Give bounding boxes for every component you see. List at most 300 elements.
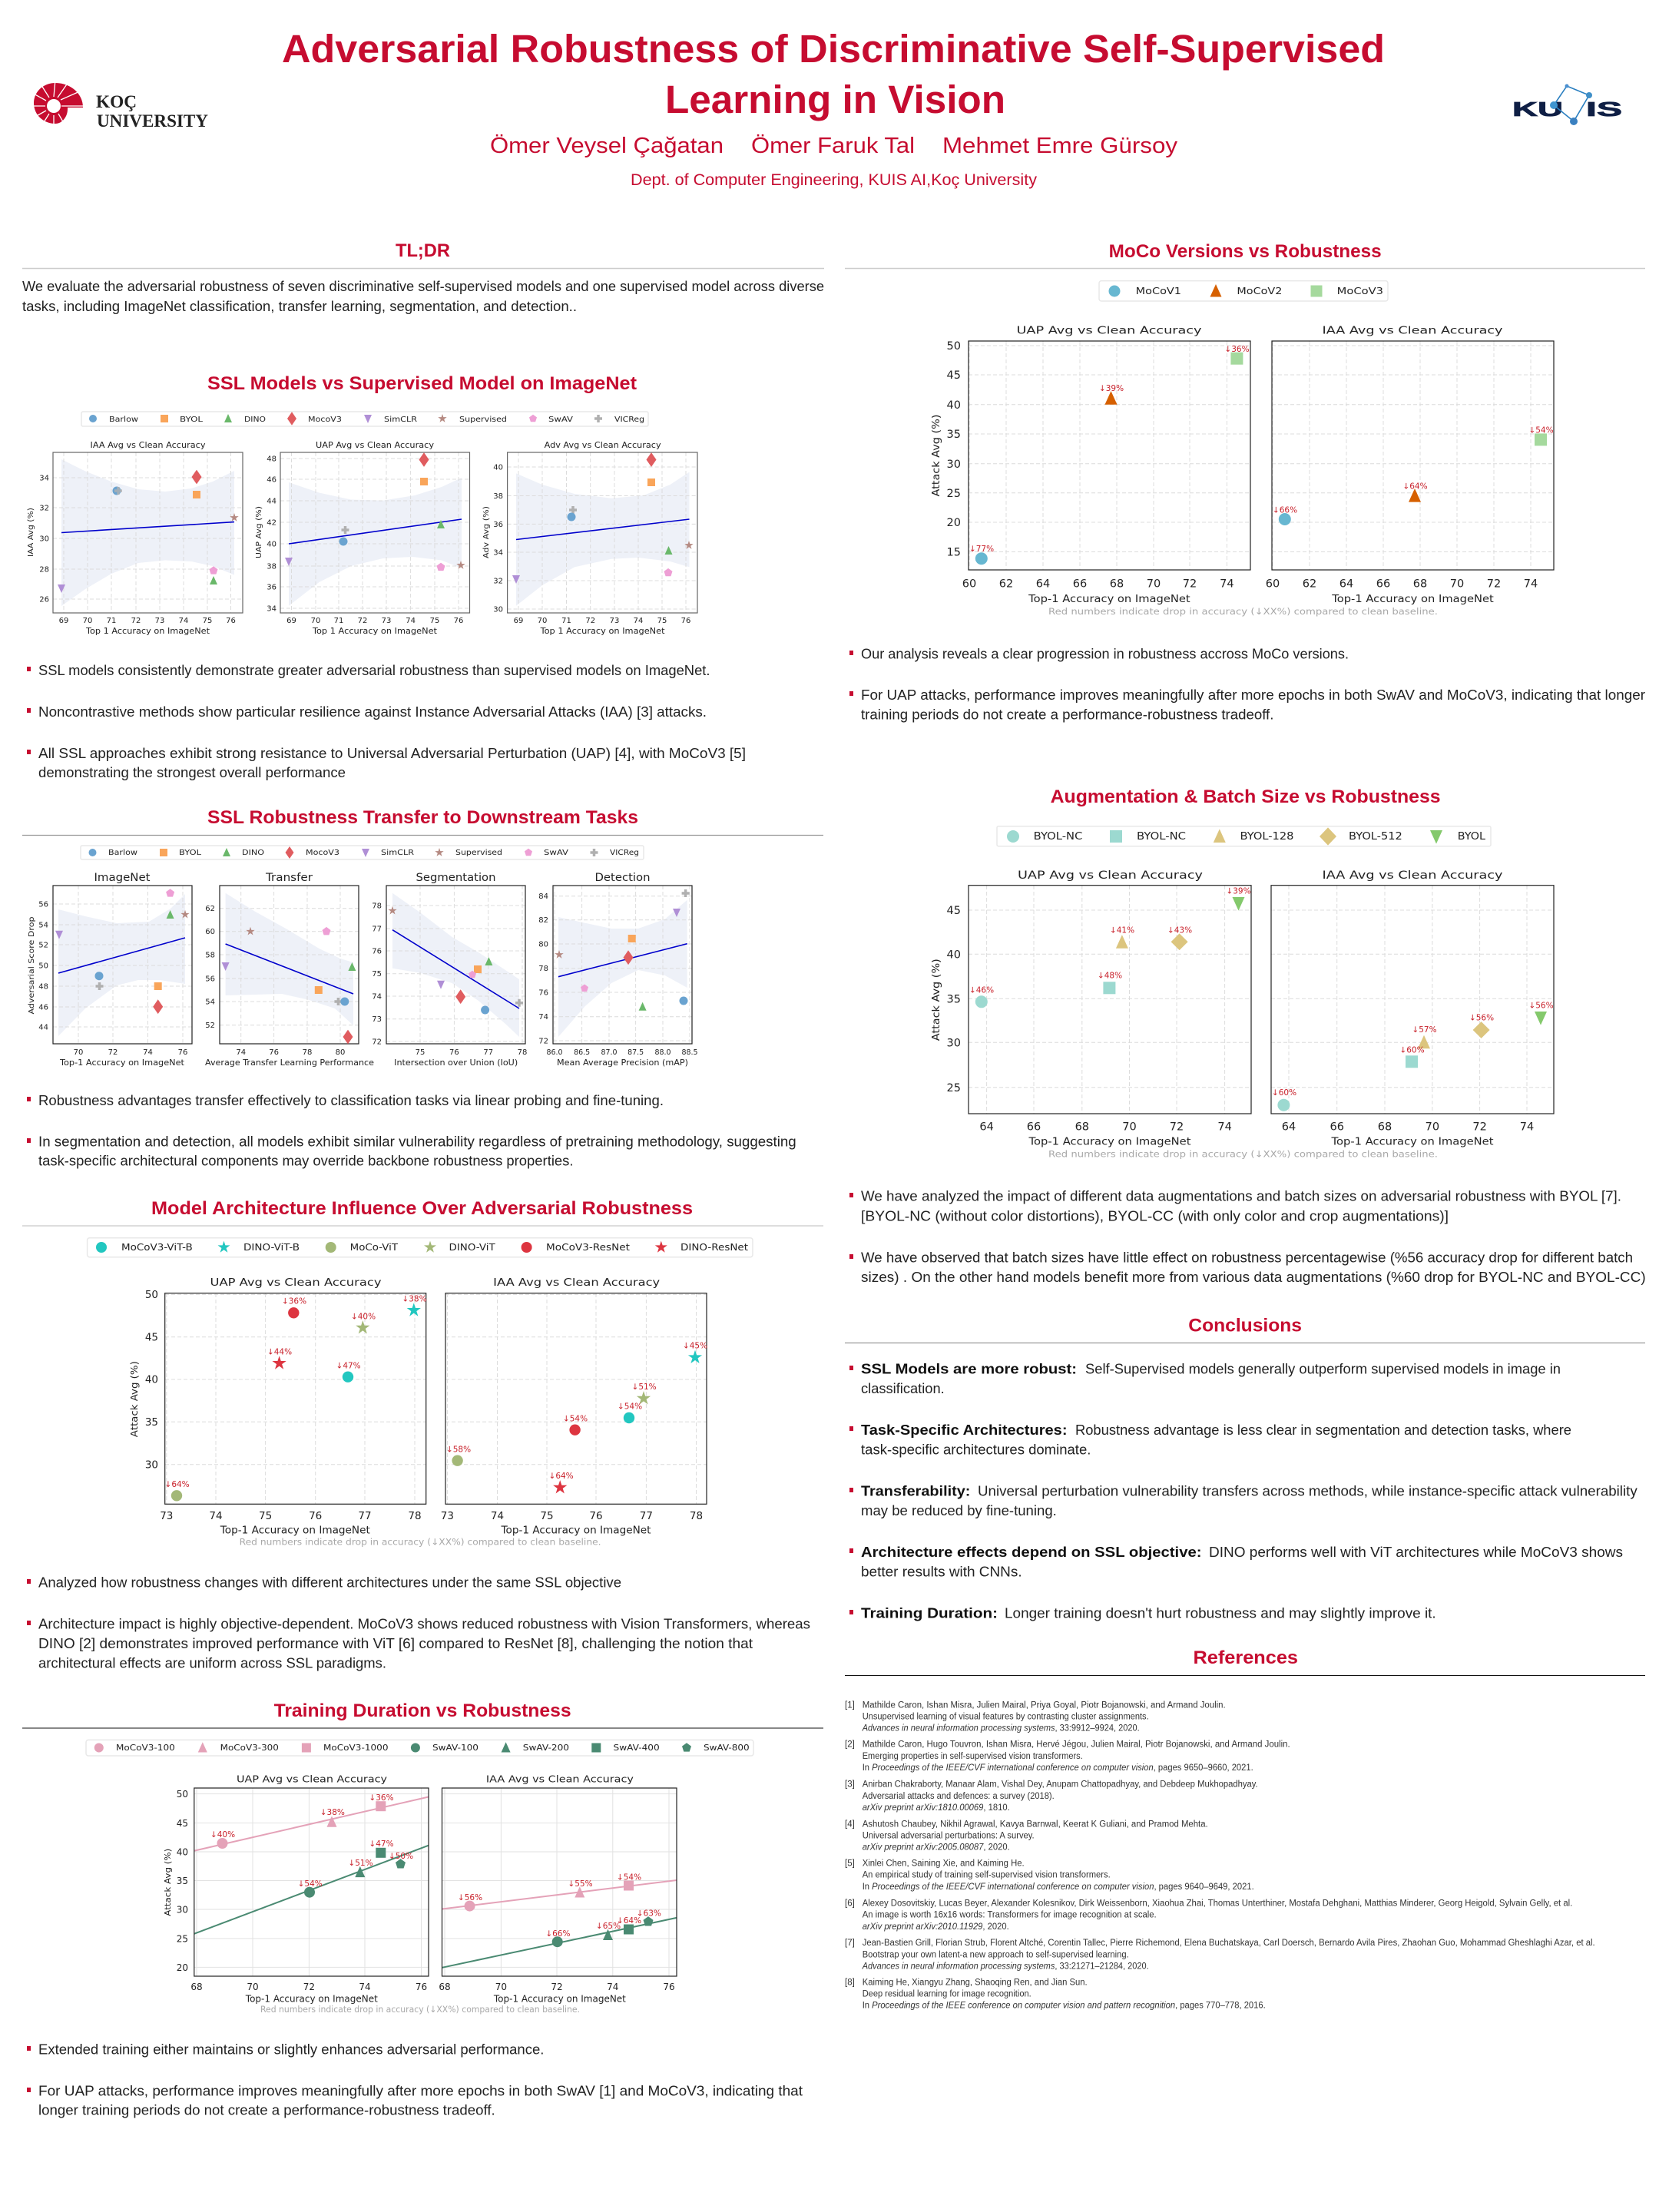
chart: Adv Avg vs Clean Accuracy: 72 [585, 617, 595, 625]
chart: UAP Avg vs Clean Accuracy: 70 [1122, 1121, 1137, 1134]
reference list: arXiv preprint arXiv:1810.00069, 1810. [863, 1803, 1010, 1813]
chart: UAP Avg vs Clean Accuracy: ↓51% [348, 1859, 373, 1868]
chart: IAA Avg vs Clean Accuracy: IAA Avg vs Clean Accuracy [493, 1277, 660, 1289]
chart: Segmentation: 77 [483, 1048, 493, 1057]
chart: UAP Avg vs Clean Accuracy: 68 [1075, 1121, 1089, 1134]
chart note: Red numbers indicate drop in accuracy (↓XX%) compared to clean baseline. [260, 2004, 580, 2015]
chart: Detection: Detection [594, 872, 650, 884]
chart: IAA Avg vs Clean Accuracy: 76 [663, 1982, 675, 1992]
chart: Adv Avg vs Clean Accuracy: 36 [493, 521, 503, 529]
chart: Detection: 87.5 [628, 1048, 644, 1057]
chart: IAA Avg vs Clean Accuracy: 73 [441, 1510, 454, 1522]
chart: Segmentation: Segmentation [416, 872, 496, 884]
summary text: We evaluate the adversarial robustness of seven discriminative self-supervised models and one supervised model across diverse [22, 278, 824, 294]
chart: IAA Avg vs Clean Accuracy: ↓54% [617, 1873, 641, 1882]
chart: UAP Avg vs Clean Accuracy: ↓44% [267, 1347, 292, 1356]
reference list: Universal adversarial perturbations: A survey. [863, 1831, 1035, 1840]
chart: UAP Avg vs Clean Accuracy: UAP Avg (%) [255, 506, 263, 558]
header: title, authors and logos [31, 27, 1622, 189]
conclusion: architecture effects: DINO performs well with ViT architectures while MoCoV3 shows [1209, 1544, 1623, 1560]
logo: Koç University: UNIVERSITY [97, 111, 208, 131]
authors: Ömer Veysel Çağatan [490, 134, 724, 158]
chart: Adv Avg vs Clean Accuracy: 40 [493, 464, 503, 472]
bullet list [27, 2041, 803, 2118]
chart: UAP Avg vs Clean Accuracy: 73 [382, 617, 391, 625]
chart note: Red numbers indicate drop in accuracy (↓XX%) compared to clean baseline. [1048, 1149, 1438, 1160]
chart: UAP Avg vs Clean Accuracy: 40 [947, 949, 961, 962]
legend: epochs: SwAV-800 [704, 1743, 750, 1753]
chart: IAA Avg vs Clean Accuracy: 75 [203, 617, 212, 625]
chart: IAA Avg vs Clean Accuracy: 62 [1303, 578, 1316, 590]
reference list: [7] [845, 1939, 855, 1948]
chart: IAA Avg vs Clean Accuracy: ↓45% [683, 1341, 707, 1350]
logo: Koç University [31, 80, 208, 131]
legend: architectures: MoCo-ViT [350, 1242, 399, 1253]
affiliation: Dept. of Computer Engineering, KUIS AI,Koç University [631, 171, 1037, 189]
conclusion: task-specific architectures: Task-Specific Architectures: [861, 1422, 1068, 1438]
chart: Detection: 80 [538, 940, 548, 949]
bullet list: demonstrating the strongest overall performance [38, 764, 346, 780]
chart: UAP Avg vs Clean Accuracy: 25 [947, 1082, 961, 1094]
chart: UAP Avg vs Clean Accuracy: 15 [947, 547, 961, 559]
conclusion: task-specific architectures [849, 1422, 1571, 1458]
legend: epochs: SwAV-400 [613, 1743, 660, 1753]
reference list: Anirban Chakraborty, Manaar Alam, Vishal Dey, Anupam Chattopadhyay, and Debdeep Mukhopadhyay. [863, 1780, 1258, 1790]
chart: IAA Avg vs Clean Accuracy: ↓65% [596, 1922, 621, 1931]
chart: IAA Avg vs Clean Accuracy: 77 [640, 1510, 653, 1522]
reference list: Advances in neural information processing systems, 33:21271–21284, 2020. [862, 1962, 1149, 1971]
bullet list: We have observed that batch sizes have little effect on robustness percentagewise (%56 accuracy drop for different batch [861, 1250, 1633, 1266]
chart: IAA Avg vs Clean Accuracy: 30 [39, 535, 49, 544]
chart: Adv Avg vs Clean Accuracy: Adv Avg vs Clean Accuracy [545, 441, 661, 450]
reference list: An empirical study of training self-supervised vision transformers. [863, 1871, 1111, 1880]
chart: ImageNet [28, 872, 192, 1068]
chart: Detection: 87.0 [601, 1048, 618, 1057]
chart: UAP Avg vs Clean Accuracy: 36 [267, 584, 276, 591]
chart: UAP Avg vs Clean Accuracy: 72 [1170, 1121, 1184, 1134]
bullet list [27, 1575, 810, 1671]
chart: Adv Avg vs Clean Accuracy: 76 [681, 617, 690, 625]
chart: IAA Avg vs Clean Accuracy: ↓63% [637, 1909, 661, 1919]
chart: Detection: 84 [538, 892, 548, 901]
chart: IAA Avg vs Clean Accuracy: Top-1 Accuracy on ImageNet [1330, 1136, 1493, 1148]
legend: models: Supervised [455, 849, 502, 857]
panel: augmentation and batch size [849, 786, 1646, 1285]
chart: IAA Avg vs Clean Accuracy: ↓55% [568, 1879, 593, 1889]
chart: Segmentation [372, 872, 527, 1068]
chart: UAP Avg vs Clean Accuracy: ↓39% [1099, 384, 1124, 393]
bullet list: Architecture impact is highly objective-dependent. MoCoV3 shows reduced robustness with Vision Transformers, whereas [38, 1616, 810, 1632]
heading: MoCo Versions vs Robustness [1109, 241, 1382, 262]
legend: epochs: MoCoV3-100 [116, 1743, 175, 1753]
bullet list: In segmentation and detection, all models exhibit similar vulnerability regardless of pretraining methodology, suggesting [38, 1134, 796, 1150]
chart: Segmentation: 75 [372, 970, 382, 979]
conclusion: training duration: Longer training doesn't hurt robustness and may slightly improve it. [1005, 1604, 1436, 1621]
chart: IAA Avg vs Clean Accuracy: 74 [607, 1982, 618, 1992]
chart: Adv Avg vs Clean Accuracy: 73 [610, 617, 619, 625]
chart: IAA Avg vs Clean Accuracy: 71 [107, 617, 116, 625]
legend: architectures: MoCoV3-ResNet [546, 1242, 630, 1253]
panel: model architecture [22, 1198, 823, 1671]
chart: IAA Avg vs Clean Accuracy [1266, 324, 1554, 605]
conclusion: SSL models: Self-Supervised models generally outperform supervised models in image in [1085, 1360, 1561, 1376]
chart: UAP Avg vs Clean Accuracy [129, 1277, 427, 1537]
reference list: Advances in neural information processing systems, 33:9912–9924, 2020. [862, 1724, 1140, 1734]
chart: UAP Avg vs Clean Accuracy: 72 [303, 1982, 315, 1992]
reference list: Mathilde Caron, Ishan Misra, Julien Mairal, Priya Goyal, Piotr Bojanowski, and Armand Joulin. [863, 1700, 1226, 1710]
chart: UAP Avg vs Clean Accuracy: 40 [267, 541, 276, 548]
bullet list: For UAP attacks, performance improves meaningfully after more epochs in both SwAV and MoCoV3, indicating that longer [861, 687, 1645, 703]
chart: ImageNet: Top-1 Accuracy on ImageNet [59, 1058, 184, 1068]
chart: UAP Avg vs Clean Accuracy: Attack Avg (%) [129, 1361, 140, 1437]
bullet list: architectural effects are uniform across SSL paradigms. [38, 1655, 386, 1671]
chart: IAA Avg vs Clean Accuracy [1271, 869, 1554, 1148]
chart: UAP Avg vs Clean Accuracy: 74 [1217, 1121, 1232, 1134]
chart: UAP Avg vs Clean Accuracy: UAP Avg vs Clean Accuracy [316, 441, 434, 450]
bullet list: task-specific architectural components may override backbone robustness properties. [38, 1153, 573, 1169]
chart: UAP Avg vs Clean Accuracy: Top-1 Accuracy on ImageNet [1028, 593, 1190, 605]
chart: IAA Avg vs Clean Accuracy: 64 [1282, 1121, 1296, 1134]
legend: models: DINO [244, 416, 266, 424]
reference list: Adversarial attacks and defences: a survey (2018). [863, 1792, 1055, 1801]
chart: Segmentation: 76 [372, 948, 382, 955]
legend: MoCo versions: MoCoV1 [1136, 286, 1181, 296]
legend: models: SwAV [544, 849, 568, 857]
legend: models: Barlow [108, 849, 137, 857]
conclusion: transferability: Universal perturbation vulnerability transfers across methods, while instance-specific attack vulnerability [978, 1482, 1637, 1498]
reference list: Jean-Bastien Grill, Florian Strub, Florent Altché, Corentin Tallec, Pierre Richemond, Elena Buchatskaya, Carl Doersch, Bernardo Avila Pires, Zhaohan Guo, Mohammad Gheshlaghi Azar, et al. [863, 1939, 1595, 1948]
chart note: Red numbers indicate drop in accuracy (↓XX%) compared to clean baseline. [1048, 606, 1438, 617]
chart: UAP Avg vs Clean Accuracy [164, 1774, 429, 2005]
chart: Transfer [205, 872, 374, 1068]
chart: IAA Avg vs Clean Accuracy: 74 [179, 617, 188, 625]
chart: UAP Avg vs Clean Accuracy: UAP Avg vs Clean Accuracy [1017, 324, 1201, 336]
heading: SSL Robustness Transfer to Downstream Tasks [207, 807, 638, 828]
conclusion: architecture effects: Architecture effects depend on SSL objective: [861, 1544, 1201, 1560]
chart: UAP Avg vs Clean Accuracy: 35 [177, 1876, 188, 1886]
chart: IAA Avg vs Clean Accuracy: 32 [39, 504, 49, 513]
chart: UAP Avg vs Clean Accuracy: UAP Avg vs Clean Accuracy [210, 1277, 381, 1289]
reference list: Emerging properties in self-supervised vision transformers. [863, 1752, 1083, 1761]
summary text: tasks, including ImageNet classification, transfer learning, segmentation, and detection.. [22, 298, 577, 314]
chart: ImageNet: 76 [178, 1048, 187, 1057]
chart: UAP Avg vs Clean Accuracy: UAP Avg vs Clean Accuracy [237, 1774, 387, 1785]
chart: UAP Avg vs Clean Accuracy: 45 [947, 905, 961, 917]
chart: Detection: 86.5 [574, 1048, 590, 1057]
chart: UAP Avg vs Clean Accuracy: 45 [177, 1818, 188, 1829]
chart: UAP Avg vs Clean Accuracy: Attack Avg (%) [931, 415, 942, 496]
bullet list: longer training periods do not create a performance-robustness tradeoff. [38, 2102, 495, 2118]
legend: models [81, 846, 644, 859]
chart: IAA Avg vs Clean Accuracy: 70 [1450, 578, 1464, 590]
bullet list: We have analyzed the impact of different data augmentations and batch sizes on adversarial robustness with BYOL [7]. [861, 1188, 1621, 1204]
chart: Segmentation: Intersection over Union (IoU) [394, 1058, 518, 1068]
chart: UAP Avg vs Clean Accuracy: ↓50% [389, 1852, 413, 1861]
panel: conclusions [845, 1315, 1645, 1621]
chart: IAA Avg vs Clean Accuracy: 70 [83, 617, 92, 625]
chart: Segmentation: 72 [372, 1038, 382, 1046]
heading: Conclusions [1188, 1315, 1302, 1336]
legend: architectures [88, 1238, 753, 1257]
chart: IAA Avg vs Clean Accuracy: ↓56% [1528, 1001, 1554, 1010]
reference list: Alexey Dosovitskiy, Lucas Beyer, Alexander Kolesnikov, Dirk Weissenborn, Xiaohua Zhai, Thomas Unterthiner, Mostafa Dehghani, Matthias Minderer, Georg Heigold, Sylvain Gelly, et al. [863, 1899, 1572, 1909]
chart: IAA Avg vs Clean Accuracy: 34 [39, 475, 49, 482]
chart: IAA Avg vs Clean Accuracy [441, 1277, 707, 1537]
chart: IAA Avg vs Clean Accuracy: 69 [59, 617, 68, 625]
chart: Detection: 82 [538, 916, 548, 925]
chart: UAP Avg vs Clean Accuracy: 77 [358, 1510, 372, 1522]
conclusion: architecture effects: better results with CNNs. [861, 1564, 1022, 1580]
bullet list: Extended training either maintains or slightly enhances adversarial performance. [38, 2041, 544, 2057]
reference list: Kaiming He, Xiangyu Zhang, Shaoqing Ren, and Jian Sun. [863, 1978, 1088, 1987]
reference list: In Proceedings of the IEEE/CVF international conference on computer vision, pages 9650–9660, 2021. [863, 1763, 1253, 1773]
chart: UAP Avg vs Clean Accuracy: ↓36% [1224, 345, 1250, 354]
chart: Adv Avg vs Clean Accuracy: Top 1 Accuracy on ImageNet [540, 627, 665, 636]
bullet list: All SSL approaches exhibit strong resistance to Universal Adversarial Perturbation (UAP) [4], with MoCoV3 [5] [38, 745, 746, 761]
reference list: [6] [845, 1899, 855, 1909]
chart: Transfer: 60 [205, 928, 215, 936]
legend: models: VICReg [610, 849, 639, 857]
chart: IAA Avg vs Clean Accuracy: 75 [540, 1510, 554, 1522]
reference list: [5] [845, 1859, 855, 1869]
chart: UAP Avg vs Clean Accuracy: ↓77% [969, 545, 994, 554]
chart: UAP Avg vs Clean Accuracy: 73 [160, 1510, 173, 1522]
chart: UAP Avg vs Clean Accuracy: 25 [177, 1934, 188, 1945]
chart: UAP Avg vs Clean Accuracy: ↓36% [369, 1793, 394, 1803]
chart: IAA Avg vs Clean Accuracy: IAA Avg vs Clean Accuracy [486, 1774, 634, 1785]
chart: UAP Avg vs Clean Accuracy: ↓54% [298, 1879, 323, 1889]
chart: Detection: 74 [538, 1013, 548, 1022]
legend: models: Supervised [459, 416, 507, 424]
chart: UAP Avg vs Clean Accuracy: 44 [267, 498, 276, 505]
chart: UAP Avg vs Clean Accuracy: 35 [947, 994, 961, 1006]
legend: models: MocoV3 [308, 416, 342, 424]
chart: UAP Avg vs Clean Accuracy [931, 324, 1250, 605]
chart: IAA Avg vs Clean Accuracy: Top-1 Accuracy on ImageNet [1331, 593, 1494, 605]
chart: UAP Avg vs Clean Accuracy: Top-1 Accuracy on ImageNet [220, 1525, 370, 1537]
chart: ImageNet: 56 [38, 900, 48, 909]
legend: BYOL variants: BYOL-NC [1137, 831, 1186, 843]
chart: Adv Avg vs Clean Accuracy: 34 [493, 548, 503, 558]
chart: UAP Avg vs Clean Accuracy: ↓38% [402, 1294, 427, 1303]
bullet list: DINO [2] demonstrates improved performance with ViT [6] compared to ResNet [8], challenging the notion that [38, 1635, 753, 1651]
chart: UAP Avg vs Clean Accuracy: 66 [1073, 578, 1087, 590]
chart: Transfer: 80 [336, 1048, 345, 1057]
chart note: Red numbers indicate drop in accuracy (↓XX%) compared to clean baseline. [240, 1537, 601, 1548]
chart: UAP Avg vs Clean Accuracy: 68 [1110, 578, 1124, 590]
chart: ImageNet: 50 [38, 962, 48, 971]
legend: MoCo versions: MoCoV2 [1237, 286, 1282, 296]
legend: models: DINO [242, 849, 264, 857]
panel: training duration [22, 1700, 823, 2118]
chart: UAP Avg vs Clean Accuracy: 64 [979, 1121, 994, 1134]
legend: BYOL variants [997, 826, 1491, 846]
chart: IAA Avg vs Clean Accuracy: ↓56% [458, 1893, 482, 1902]
reference list [845, 1700, 1595, 2011]
chart: UAP Avg vs Clean Accuracy: 20 [177, 1962, 188, 1973]
chart: IAA Avg vs Clean Accuracy: 74 [1524, 578, 1538, 590]
chart: UAP Avg vs Clean Accuracy: 66 [1027, 1121, 1041, 1134]
conclusion: task-specific architectures: Robustness advantage is less clear in segmentation and detection tasks, where [1075, 1422, 1571, 1438]
chart: UAP Avg vs Clean Accuracy: 34 [267, 605, 276, 613]
reference list: Mathilde Caron, Hugo Touvron, Ishan Misra, Hervé Jégou, Julien Mairal, Piotr Bojanowski, and Armand Joulin. [863, 1740, 1290, 1750]
legend: models: SimCLR [384, 416, 417, 424]
reference list: [8] [845, 1978, 855, 1987]
legend: epochs: SwAV-100 [432, 1743, 478, 1753]
chart: Adv Avg vs Clean Accuracy: 30 [493, 605, 503, 614]
chart: IAA Avg vs Clean Accuracy: ↓60% [1399, 1045, 1425, 1055]
chart: IAA Avg vs Clean Accuracy: ↓66% [1273, 506, 1297, 515]
bullet list: SSL models consistently demonstrate greater adversarial robustness than supervised models on ImageNet. [38, 662, 710, 678]
chart: UAP Avg vs Clean Accuracy: 45 [145, 1332, 158, 1344]
chart: IAA Avg vs Clean Accuracy: ↓64% [549, 1472, 574, 1481]
chart: UAP Avg vs Clean Accuracy: 60 [962, 578, 976, 590]
chart: UAP Avg vs Clean Accuracy: Top-1 Accuracy on ImageNet [245, 1994, 378, 2005]
conclusion: architecture effects [849, 1544, 1623, 1580]
chart: IAA Avg vs Clean Accuracy: 60 [1266, 578, 1280, 590]
legend: models: MocoV3 [306, 849, 339, 857]
bullet list: Analyzed how robustness changes with different architectures under the same SSL objective [38, 1575, 621, 1591]
legend: architectures: DINO-ViT-B [243, 1242, 300, 1253]
chart: UAP Avg vs Clean Accuracy: 20 [947, 517, 961, 529]
chart: IAA Avg vs Clean Accuracy: IAA Avg vs Clean Accuracy [1323, 324, 1503, 336]
legend: models [81, 412, 648, 426]
bullet list [27, 662, 746, 780]
bullet list: training periods do not create a performance-robustness tradeoff. [861, 707, 1273, 723]
chart: UAP Avg vs Clean Accuracy: 76 [454, 617, 463, 625]
reference list: [1] [845, 1700, 855, 1710]
chart: Detection: 86.0 [547, 1048, 562, 1057]
chart: Transfer: 74 [236, 1048, 246, 1057]
reference list: Deep residual learning for image recognition. [863, 1990, 1031, 1999]
chart: ImageNet: 72 [108, 1048, 118, 1057]
chart: Transfer: 76 [269, 1048, 279, 1057]
chart: UAP Avg vs Clean Accuracy: 72 [358, 617, 367, 625]
chart: UAP Avg vs Clean Accuracy: 71 [334, 617, 343, 625]
chart: Transfer: 58 [205, 951, 215, 960]
authors: Mehmet Emre Gürsoy [942, 134, 1178, 158]
bullet list: sizes) . On the other hand models benefit more from various data augmentations (%60 drop for BYOL-NC and BYOL-CC) [861, 1269, 1646, 1285]
chart: IAA Avg vs Clean Accuracy: ↓66% [545, 1929, 570, 1939]
conclusion: task-specific architectures: task-specific architectures dominate. [861, 1442, 1091, 1458]
legend: BYOL variants: BYOL-NC [1034, 831, 1082, 843]
chart: IAA Avg vs Clean Accuracy: ↓54% [1528, 426, 1554, 435]
chart: Segmentation: 78 [372, 902, 382, 911]
reference list: [3] [845, 1780, 855, 1790]
chart: UAP Avg vs Clean Accuracy: 74 [359, 1982, 371, 1992]
chart: UAP Avg vs Clean Accuracy: ↓43% [1167, 926, 1192, 935]
chart: Adv Avg vs Clean Accuracy: Adv Avg (%) [482, 506, 491, 558]
chart: UAP Avg vs Clean Accuracy: ↓40% [351, 1312, 376, 1321]
conclusion: transferability [849, 1482, 1637, 1518]
chart: IAA Avg vs Clean Accuracy: ↓58% [446, 1445, 471, 1455]
chart: IAA Avg vs Clean Accuracy: ↓56% [1469, 1014, 1494, 1023]
chart: UAP Avg vs Clean Accuracy: 48 [267, 455, 276, 464]
chart: IAA Avg vs Clean Accuracy: IAA Avg vs Clean Accuracy [91, 441, 206, 450]
chart: UAP Avg vs Clean Accuracy: 35 [947, 429, 961, 441]
chart: Segmentation: 73 [372, 1015, 382, 1024]
legend: epochs [86, 1740, 753, 1756]
legend: BYOL variants: BYOL-128 [1240, 831, 1293, 843]
chart: IAA Avg vs Clean Accuracy [439, 1774, 677, 2005]
chart: Detection: 88.0 [654, 1048, 671, 1057]
legend: MoCo versions [1099, 281, 1388, 301]
reference list: Unsupervised learning of visual features by contrasting cluster assignments. [863, 1713, 1149, 1722]
chart: UAP Avg vs Clean Accuracy: 70 [247, 1982, 259, 1992]
legend: models: BYOL [179, 849, 201, 857]
chart: Adv Avg vs Clean Accuracy: 70 [538, 617, 547, 625]
bullet list: [BYOL-NC (without color distortions), BYOL-CC (with only color and crop augmentations)] [861, 1208, 1449, 1224]
reference list: Xinlei Chen, Saining Xie, and Kaiming He. [863, 1859, 1025, 1869]
chart: UAP Avg vs Clean Accuracy: 74 [406, 617, 416, 625]
chart: UAP Avg vs Clean Accuracy: 70 [1147, 578, 1161, 590]
chart: IAA Avg vs Clean Accuracy: ↓54% [618, 1402, 642, 1412]
chart: IAA Avg vs Clean Accuracy: Top 1 Accuracy on ImageNet [85, 627, 210, 636]
reference list: In Proceedings of the IEEE conference on computer vision and pattern recognition, pages 770–778, 2016. [863, 2002, 1266, 2011]
chart: UAP Avg vs Clean Accuracy: 78 [408, 1510, 422, 1522]
reference list: [4] [845, 1820, 855, 1829]
bullet list: Robustness advantages transfer effectively to classification tasks via linear probing and fine-tuning. [38, 1092, 664, 1108]
chart: UAP Avg vs Clean Accuracy: 76 [309, 1510, 322, 1522]
heading: SSL Models vs Supervised Model on ImageNet [207, 373, 637, 394]
chart: IAA Avg vs Clean Accuracy: ↓57% [1412, 1025, 1437, 1035]
authors: Ömer Faruk Tal [751, 134, 915, 158]
conclusion: transferability: Transferability: [861, 1482, 970, 1498]
chart: Transfer: Transfer [265, 872, 313, 884]
chart: UAP Avg vs Clean Accuracy: 75 [259, 1510, 272, 1522]
chart: UAP Avg vs Clean Accuracy [931, 869, 1251, 1148]
chart: Detection: 88.5 [682, 1048, 697, 1057]
legend: BYOL variants: BYOL-512 [1349, 831, 1402, 843]
chart: UAP Avg vs Clean Accuracy: ↓46% [969, 985, 994, 995]
chart: UAP Avg vs Clean Accuracy: 38 [267, 562, 276, 571]
legend: models: VICReg [614, 416, 644, 424]
conclusion: SSL models: classification. [861, 1380, 945, 1396]
bullet list [27, 1092, 796, 1169]
chart: UAP Avg vs Clean Accuracy: 50 [947, 340, 961, 353]
chart: UAP Avg vs Clean Accuracy: ↓38% [320, 1808, 345, 1817]
chart: UAP Avg vs Clean Accuracy [255, 441, 470, 636]
chart: Segmentation: 78 [518, 1048, 527, 1057]
logo: KUIS: KU [1512, 98, 1563, 121]
legend: MoCo versions: MoCoV3 [1337, 286, 1383, 296]
chart: UAP Avg vs Clean Accuracy: 75 [430, 617, 439, 625]
chart: Transfer: 62 [205, 905, 215, 913]
chart: IAA Avg vs Clean Accuracy: 26 [39, 596, 49, 604]
panel: SSL models vs supervised [27, 373, 746, 780]
heading: Training Duration vs Robustness [274, 1700, 571, 1721]
legend: epochs: MoCoV3-300 [220, 1743, 279, 1753]
chart: IAA Avg vs Clean Accuracy: 74 [491, 1510, 504, 1522]
chart: IAA Avg vs Clean Accuracy: 28 [39, 565, 49, 575]
panel: TL;DR [22, 240, 824, 314]
chart: UAP Avg vs Clean Accuracy: Attack Avg (%) [164, 1849, 173, 1916]
bullet list: For UAP attacks, performance improves meaningfully after more epochs in both SwAV [1] and MoCoV3, indicating that [38, 2082, 803, 2098]
chart: IAA Avg vs Clean Accuracy: Top-1 Accuracy on ImageNet [500, 1525, 651, 1537]
panel: MoCo versions [845, 241, 1645, 723]
chart: UAP Avg vs Clean Accuracy: 40 [177, 1846, 188, 1857]
chart: Adv Avg vs Clean Accuracy: 32 [493, 578, 503, 585]
chart: IAA Avg vs Clean Accuracy: ↓51% [632, 1382, 657, 1392]
conclusion: training duration: Training Duration: [861, 1604, 998, 1621]
chart: IAA Avg vs Clean Accuracy: 72 [131, 617, 141, 625]
chart: Transfer: Average Transfer Learning Performance [205, 1058, 374, 1068]
chart: UAP Avg vs Clean Accuracy: 74 [209, 1510, 223, 1522]
chart: UAP Avg vs Clean Accuracy: ↓64% [165, 1480, 190, 1489]
chart: IAA Avg vs Clean Accuracy: ↓64% [617, 1916, 641, 1926]
chart: IAA Avg vs Clean Accuracy: 68 [1413, 578, 1427, 590]
chart: ImageNet: ImageNet [94, 872, 151, 884]
